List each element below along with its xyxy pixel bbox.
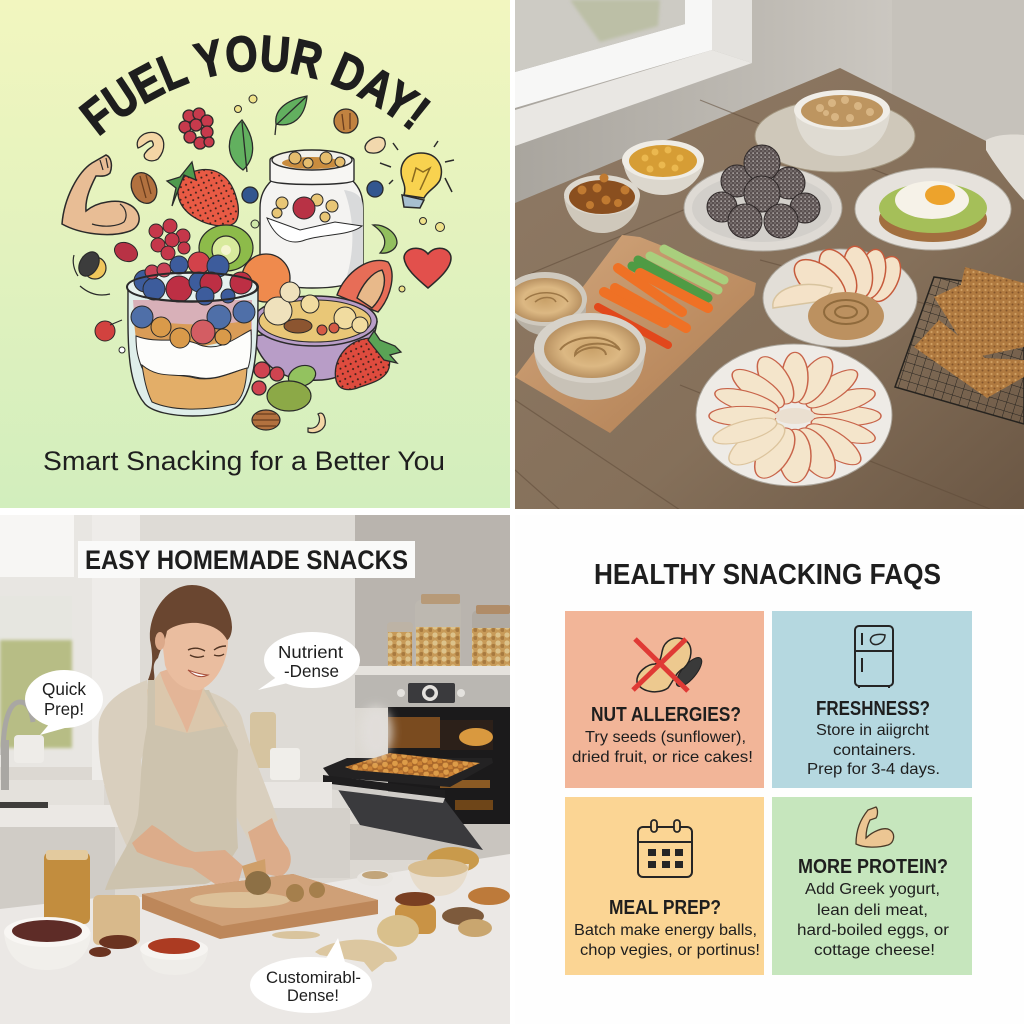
card: nut allergies: dried fruit, or rice cakes!: [572, 749, 753, 766]
card: more protein: lean deli meat,: [817, 902, 928, 919]
bowl of chickpeas on plate: [755, 90, 915, 172]
plate of fanned apple slices: [696, 344, 892, 486]
ingredient jars and bowls left: [4, 850, 208, 960]
linen towel: [986, 134, 1024, 200]
card: more protein: Add Greek yogurt,: [805, 881, 940, 898]
card: nut allergies: NUT ALLERGIES?: [591, 704, 741, 726]
icon: orange slice: [242, 254, 290, 302]
cutting board with energy balls: [142, 871, 378, 939]
icon: lower strawberry: [335, 331, 401, 390]
icon: fridge: [855, 626, 893, 688]
icon: lightbulb: [380, 141, 454, 208]
card: more protein: [772, 797, 972, 975]
callout: Nutrient Dense: [258, 632, 360, 690]
face and neck: [160, 670, 203, 732]
title: Fuel Your Day: FUEL YOUR DAY!: [78, 35, 431, 136]
window with greenery: [0, 515, 92, 767]
head: [148, 585, 232, 690]
panel: kitchen scene photo: [0, 515, 510, 1024]
panel: table of snacks photo: [503, 0, 1024, 510]
bowl of roasted chickpeas: [564, 174, 640, 233]
card: freshness: containers.: [833, 742, 916, 759]
icon: berries and olive: [252, 362, 325, 433]
icon: red heart: [404, 248, 451, 288]
card: meal prep: chop vegies, or portinus!: [580, 942, 760, 959]
wooden table: [515, 68, 1024, 510]
card: freshness: [772, 611, 972, 788]
card: meal prep: MEAL PREP?: [609, 897, 721, 919]
counter and cabinets: [0, 702, 350, 922]
card: freshness: Store in aiigrcht: [816, 722, 930, 739]
callout: Nutrient Dense: Nutrient: [278, 642, 343, 662]
heading: Easy Homemade Snacks: EASY HOMEMADE SNACKS: [85, 545, 408, 575]
icon: flexed arm: [62, 155, 139, 235]
card: nut allergies: Try seeds (sunflower),: [585, 729, 746, 746]
window: [515, 0, 752, 146]
panel: Healthy Snacking FAQs: [515, 515, 1024, 1024]
icon: nuts and berries scattered top: [126, 108, 385, 208]
bowl of golden chickpeas: [622, 140, 704, 195]
carrot and celery sticks: [598, 249, 724, 345]
right shirt sleeve: [210, 692, 278, 842]
card: freshness: FRESHNESS?: [816, 698, 930, 720]
card: more protein: hard-boiled eggs, or: [797, 922, 950, 939]
heading: Healthy Snacking FAQs: HEALTHY SNACKING FAQS: [594, 559, 941, 591]
icon: raspberries: [111, 219, 190, 265]
card: meal prep: [565, 797, 764, 975]
callout: Nutrient Dense: -Dense: [284, 661, 339, 681]
card: freshness: Prep for 3-4 days.: [807, 761, 940, 778]
dip bowl left: [515, 272, 587, 335]
callout: Customizable: Dense!: [287, 986, 339, 1005]
apron: [105, 680, 238, 890]
icon: mason jar: [260, 150, 363, 288]
callout: Quick Prep: Prep!: [44, 699, 84, 719]
callout: Customizable: Customirabl-: [266, 968, 361, 987]
shelf jars: [355, 594, 510, 675]
left shirt sleeve: [98, 680, 148, 846]
oven: [320, 675, 510, 860]
forearm left: [132, 825, 243, 884]
cutting board: [515, 235, 756, 433]
icon: crossed out peanut: [633, 638, 706, 692]
icon: yellow small dots: [119, 95, 444, 353]
card: nut allergies: [565, 611, 764, 788]
card: more protein: MORE PROTEIN?: [798, 856, 948, 878]
card: more protein: cottage cheese!: [814, 942, 935, 959]
panel: Fuel Your Day illustration: [0, 0, 510, 508]
forearm right: [248, 818, 291, 877]
subtitle: Smart Snacking for a Better You: [43, 446, 445, 476]
plate with avocado toast and egg: [855, 168, 1011, 250]
plate of energy balls: [684, 145, 842, 251]
icon: melon wedge: [337, 260, 392, 312]
callout: Customizable: [250, 938, 372, 1013]
icon: kiwi: [199, 225, 253, 271]
card: meal prep: Batch make energy balls,: [574, 922, 757, 939]
rolling pin: [242, 859, 266, 880]
icon: calendar: [638, 820, 692, 877]
icon: bicep: [856, 807, 894, 847]
icon: green crescent: [373, 225, 397, 253]
ingredients right: [272, 847, 510, 972]
neck and shirt collar: [147, 672, 228, 735]
woman rolling snack balls: [98, 585, 291, 890]
icon: green leaves: [229, 96, 307, 172]
dip bowl front: [534, 313, 646, 400]
icon: purple bowl of granola: [253, 282, 377, 380]
icon: cherry: [95, 320, 122, 341]
icon: glass parfait: [127, 252, 258, 416]
cooling rack with seed crackers: [895, 267, 1024, 424]
icon: sunflower seed: [73, 248, 110, 295]
callout: Quick Prep: Quick: [42, 679, 86, 699]
callout: Quick Prep: [25, 670, 103, 735]
plate of apple slices with nut butter: [763, 243, 917, 347]
countertop: [0, 854, 510, 1024]
icon: top strawberry: [167, 162, 238, 226]
